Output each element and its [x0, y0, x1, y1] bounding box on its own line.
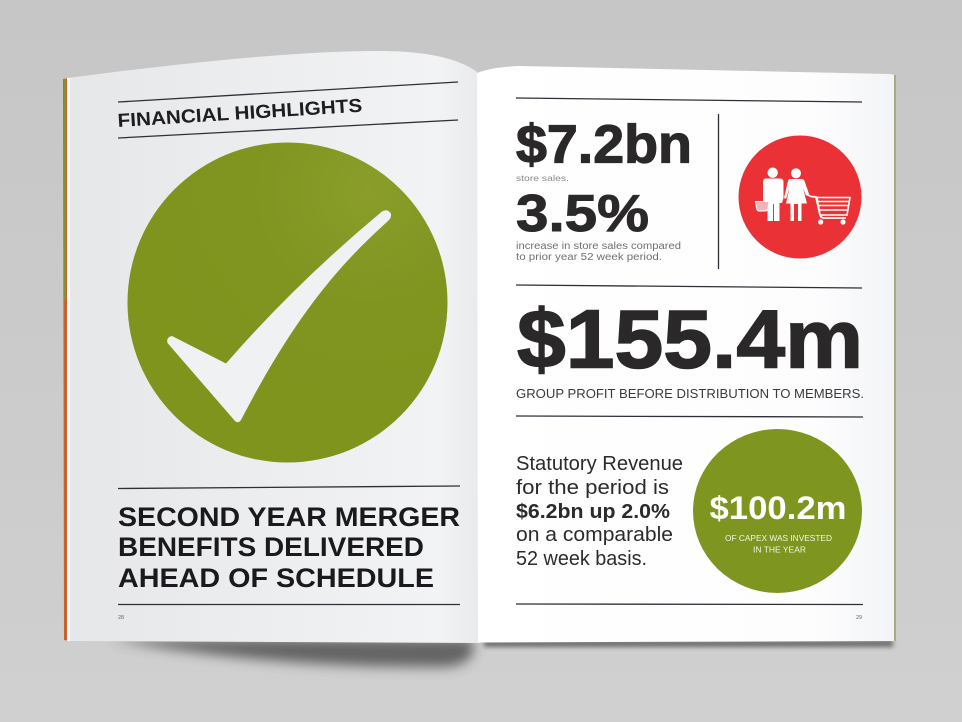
book shadow — [110, 639, 893, 667]
callout: capex circle — [693, 429, 862, 593]
panel: left page — [63, 51, 479, 643]
icon: basket — [756, 202, 769, 211]
statutory revenue text: on a comparable — [516, 524, 673, 546]
statutory revenue text: 52 week basis. — [516, 548, 647, 570]
rule bottom — [516, 603, 863, 606]
statutory revenue text: Statutory Revenue — [516, 453, 683, 475]
rule above headline — [118, 486, 460, 488]
icon: green check circle — [128, 142, 448, 462]
callout: capex circle: IN THE YEAR — [753, 544, 806, 554]
stat: increase — [516, 185, 681, 263]
heading rule bottom — [118, 120, 458, 138]
stat: group profit: GROUP PROFIT BEFORE DISTRIBUTION TO MEMBERS. — [516, 386, 864, 401]
stat: increase: increase in store sales compared — [516, 241, 681, 252]
panel: right page — [477, 66, 896, 642]
icon: man — [763, 168, 784, 221]
headline: SECOND YEAR MERGER — [118, 502, 460, 532]
headline — [118, 502, 460, 593]
heading: FINANCIAL HIGHLIGHTS — [117, 96, 363, 132]
stat: increase: to prior year 52 week period. — [516, 252, 662, 263]
headline: AHEAD OF SCHEDULE — [118, 563, 434, 593]
stat: increase: 3.5% — [516, 185, 649, 243]
page number 28: 28 — [118, 615, 124, 621]
rule below headline — [118, 604, 460, 606]
stat: group profit: $155.4m — [517, 292, 863, 386]
rule lower — [516, 416, 863, 417]
stat: store sales: $7.2bn — [516, 114, 692, 174]
callout: capex circle: OF CAPEX WAS INVESTED — [725, 533, 832, 543]
headline: BENEFITS DELIVERED — [118, 532, 424, 562]
statutory revenue text: for the period is — [516, 477, 669, 499]
heading rule top — [118, 82, 458, 102]
statutory revenue text: $6.2bn up 2.0% — [516, 501, 670, 523]
icon: cart — [806, 194, 850, 225]
vertical divider — [718, 114, 720, 269]
page number 29: 29 — [856, 615, 862, 621]
callout: capex circle: $100.2m — [710, 490, 846, 526]
icon: shoppers in red circle — [738, 136, 862, 258]
rule mid — [516, 285, 862, 288]
stat: store sales: store sales. — [516, 173, 569, 183]
right page edge — [894, 75, 896, 641]
icon: woman — [784, 168, 809, 221]
statutory revenue text — [516, 453, 683, 570]
top rule — [516, 98, 862, 102]
